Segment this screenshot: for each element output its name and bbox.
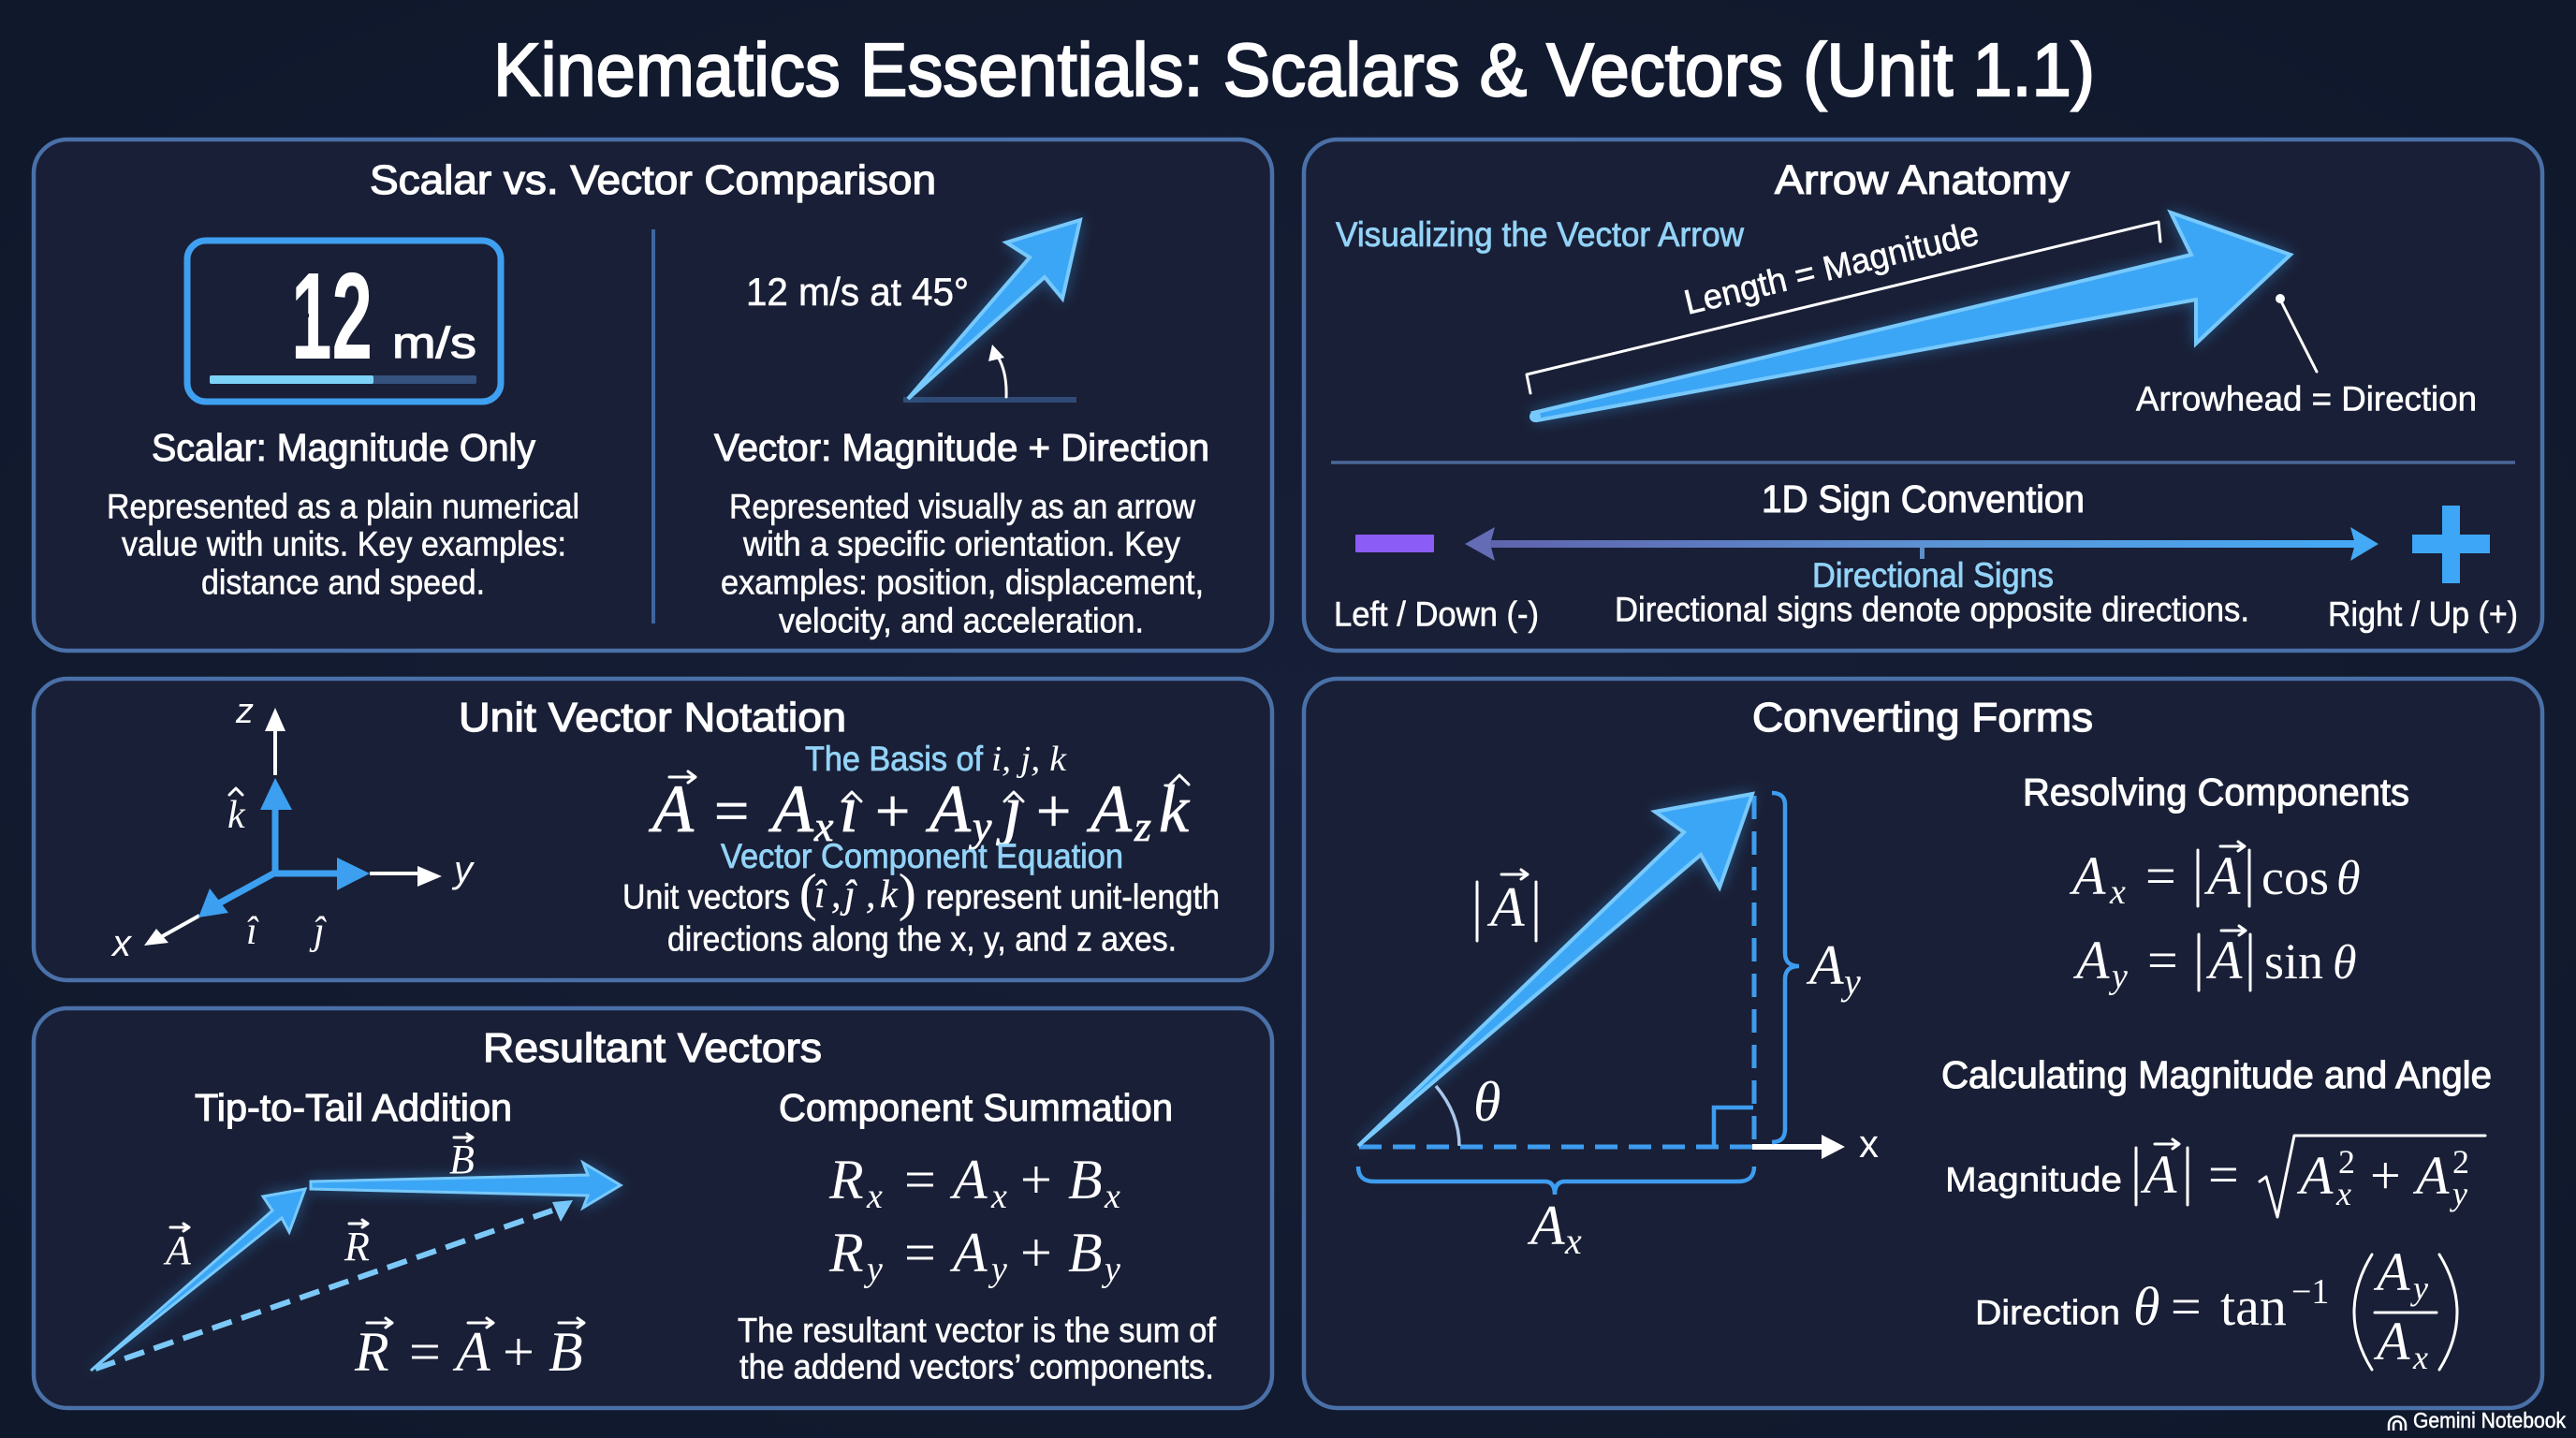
text block: scalar description: Represented as a plain numerical bbox=[107, 487, 579, 526]
equation: magnitude: 2 bbox=[2452, 1143, 2469, 1181]
equation: component sums: y bbox=[1101, 1250, 1120, 1289]
text block: scalar description: distance and speed. bbox=[201, 564, 485, 601]
equations: component formulas: = bbox=[2145, 845, 2176, 906]
text block: unit vector description: î bbox=[814, 873, 827, 917]
equation: component sums: = bbox=[904, 1222, 936, 1284]
text block: resultant description: the addend vectors’ components. bbox=[739, 1348, 1214, 1386]
subheading: visualizing the vector arrow: Visualizing the Vector Arrow bbox=[1336, 215, 1744, 254]
text block: vector description: Represented visually as an arrow bbox=[729, 487, 1195, 526]
subheading: component summation: Component Summation bbox=[779, 1086, 1173, 1129]
equation: unit vector decomposition: y bbox=[969, 802, 992, 850]
equation: unit vector decomposition: x bbox=[813, 802, 834, 850]
diagram: 3D axes with unit vectors: k bbox=[227, 794, 246, 837]
equation: direction angle: A bbox=[2373, 1311, 2410, 1372]
subheading: basis: The Basis of bbox=[805, 740, 984, 778]
equation: direction angle: −1 bbox=[2291, 1272, 2329, 1312]
equations: component formulas: = bbox=[2147, 930, 2178, 990]
panel: scalar vs vector comparison bbox=[34, 139, 1272, 651]
diagram: tip-to-tail vector addition bbox=[91, 1134, 621, 1371]
heading: unit vector notation: Unit Vector Notation bbox=[459, 695, 846, 741]
equation: unit vector decomposition: = bbox=[714, 777, 749, 845]
equations: component formulas: A bbox=[2205, 930, 2243, 990]
text block: unit vector description: Unit vectors bbox=[622, 878, 790, 916]
equation: unit vector decomposition: ı bbox=[840, 771, 858, 846]
panel: unit vector notation bbox=[34, 679, 1272, 980]
equation: R = A + B: = bbox=[409, 1321, 441, 1383]
equation: component sums: + bbox=[1020, 1149, 1052, 1211]
text block: unit vector description: k bbox=[880, 873, 899, 917]
equations: component formulas: θ bbox=[2336, 852, 2361, 905]
heading: resultant vectors: Resultant Vectors bbox=[483, 1025, 822, 1071]
equations: component formulas: cos bbox=[2261, 849, 2329, 905]
equations: component formulas: A bbox=[2069, 845, 2106, 906]
equation: unit vector decomposition: + bbox=[1036, 777, 1071, 845]
title: Kinematics Essentials: Scalars & Vectors (Unit 1.1) bbox=[493, 28, 2095, 111]
diagram: 3D axes with unit vectors: ĵ bbox=[309, 910, 327, 953]
text block: resultant description bbox=[738, 1311, 1217, 1386]
text block: scalar description: Scalar: Magnitude Only bbox=[152, 426, 535, 469]
icon: scalar digital readout: m/s bbox=[392, 318, 476, 367]
diagram: 3D axes with unit vectors: î bbox=[246, 910, 259, 953]
panel: resultant vectors bbox=[34, 1008, 1272, 1408]
equation: direction angle: y bbox=[2410, 1269, 2428, 1307]
diagram: right triangle components: A bbox=[1486, 876, 1525, 938]
text block: unit vector description: represent unit-length bbox=[926, 878, 1220, 916]
equation: R = A + B: R bbox=[354, 1321, 389, 1383]
equation: direction angle: x bbox=[2412, 1339, 2428, 1376]
text block: unit vector description: ) bbox=[899, 864, 916, 922]
equation: component sums: A bbox=[949, 1149, 988, 1211]
equation: component sums: x bbox=[866, 1177, 883, 1216]
equation: R = A + B bbox=[354, 1318, 584, 1383]
caption: directional signs: Directional signs denote opposite directions. bbox=[1615, 590, 2249, 629]
equation: unit vector decomposition: A bbox=[1087, 771, 1133, 846]
equation: direction angle bbox=[1975, 1241, 2457, 1376]
diagram: anatomy arrow with labels bbox=[1527, 213, 2477, 422]
diagram: anatomy arrow with labels: Arrowhead = Direction bbox=[2136, 380, 2477, 418]
icon: plus sign bbox=[2412, 506, 2490, 583]
equation: unit vector decomposition: ȷ bbox=[996, 771, 1022, 846]
diagram: right triangle components bbox=[1358, 793, 1879, 1262]
equation: R = A + B: + bbox=[503, 1321, 534, 1383]
equation: unit vector decomposition: k bbox=[1159, 771, 1191, 846]
icon: vector arrow at 45 degrees: 12 m/s at 45° bbox=[746, 270, 969, 314]
label: left down: Left / Down (-) bbox=[1334, 595, 1539, 633]
subheading: basis: i, j, k bbox=[991, 740, 1067, 779]
text block: unit vector description bbox=[622, 864, 1220, 959]
diagram: 3D axes with unit vectors: z bbox=[235, 692, 254, 731]
text block: unit vector description: , bbox=[831, 873, 841, 917]
equation: magnitude: + bbox=[2370, 1145, 2401, 1206]
diagram: tip-to-tail vector addition: B bbox=[449, 1137, 475, 1182]
equations: component formulas: x bbox=[2109, 873, 2126, 912]
text block: unit vector description: directions along the x, y, and z axes. bbox=[667, 919, 1177, 959]
equation: component sums: R bbox=[828, 1149, 864, 1211]
equations: component formulas: A bbox=[2203, 845, 2241, 906]
watermark: Gemini Notebook: Gemini Notebook bbox=[2413, 1408, 2566, 1432]
equation: component sums bbox=[828, 1149, 1120, 1289]
text block: unit vector description: ( bbox=[799, 864, 817, 922]
equation: direction angle: A bbox=[2373, 1241, 2410, 1302]
equation: component sums: x bbox=[1104, 1177, 1120, 1216]
equation: component sums: B bbox=[1068, 1149, 1103, 1211]
equation: component sums: + bbox=[1020, 1222, 1052, 1284]
heading: converting forms: Converting Forms bbox=[1752, 695, 2093, 741]
equations: component formulas: y bbox=[2108, 957, 2128, 996]
diagram: 3D axes with unit vectors bbox=[110, 692, 476, 964]
subheading: component equation: Vector Component Equation bbox=[721, 837, 1123, 875]
equation: component sums: y bbox=[988, 1250, 1007, 1289]
equation: unit vector decomposition bbox=[649, 771, 1191, 850]
diagram: right triangle components: x bbox=[1859, 1122, 1879, 1166]
equation: magnitude: A bbox=[2412, 1145, 2450, 1206]
caption: directional signs: Directional Signs bbox=[1812, 556, 2054, 594]
equations: component formulas: sin bbox=[2264, 933, 2323, 990]
text block: scalar description: value with units. Key examples: bbox=[122, 524, 566, 564]
text block: vector description bbox=[714, 426, 1209, 640]
equation: component sums: A bbox=[949, 1222, 988, 1284]
icon: scalar digital readout: 12 bbox=[291, 247, 373, 385]
equation: direction angle: = bbox=[2171, 1276, 2202, 1337]
equation: unit vector decomposition: A bbox=[768, 771, 814, 846]
panel: converting forms bbox=[1304, 679, 2542, 1408]
diagram: right triangle components: A bbox=[1527, 1195, 1565, 1256]
equation: unit vector decomposition: A bbox=[926, 771, 972, 846]
equation: R = A + B: A bbox=[452, 1321, 490, 1383]
caption: directional signs bbox=[1615, 556, 2249, 629]
label: right up: Right / Up (+) bbox=[2328, 595, 2518, 633]
heading: 1D sign convention: 1D Sign Convention bbox=[1762, 477, 2085, 521]
equation: magnitude: A bbox=[2296, 1145, 2334, 1206]
diagram: right triangle components: θ bbox=[1473, 1071, 1500, 1133]
equation: magnitude: = bbox=[2208, 1144, 2239, 1205]
text block: vector description: Vector: Magnitude + Direction bbox=[714, 426, 1209, 469]
diagram: 3D axes with unit vectors: x bbox=[110, 923, 133, 964]
diagram: right triangle components: x bbox=[1564, 1220, 1582, 1262]
equation: magnitude: 2 bbox=[2338, 1143, 2355, 1181]
heading: scalar vs vector: Scalar vs. Vector Comparison bbox=[370, 157, 936, 203]
subheading: resolving components: Resolving Components bbox=[2023, 770, 2409, 814]
equation: component sums: B bbox=[1068, 1222, 1103, 1284]
subheading: calculating magnitude and angle: Calculating Magnitude and Angle bbox=[1941, 1053, 2492, 1096]
subheading: tip to tail: Tip-to-Tail Addition bbox=[195, 1086, 512, 1129]
equation: component sums: = bbox=[904, 1149, 936, 1211]
equation: unit vector decomposition: A bbox=[649, 771, 695, 846]
equation: magnitude: A bbox=[2140, 1144, 2177, 1205]
diagram: 3D axes with unit vectors: y bbox=[451, 849, 476, 890]
icon: scalar digital readout bbox=[187, 241, 501, 402]
equation: direction angle: tan bbox=[2220, 1276, 2287, 1337]
diagram: tip-to-tail vector addition: A bbox=[163, 1227, 192, 1273]
equation: component sums: R bbox=[828, 1222, 864, 1284]
icon: vector arrow at 45 degrees bbox=[746, 220, 1080, 400]
diagram: right triangle components: y bbox=[1840, 961, 1861, 1003]
text block: unit vector description: ĵ bbox=[840, 873, 857, 917]
equations: component formulas: A bbox=[2072, 930, 2110, 990]
text block: resultant description: The resultant vector is the sum of bbox=[738, 1311, 1217, 1350]
text block: scalar description bbox=[107, 426, 579, 601]
text block: vector description: with a specific orientation. Key bbox=[742, 524, 1180, 564]
equation: magnitude: Magnitude bbox=[1945, 1161, 2122, 1198]
equations: component formulas: θ bbox=[2333, 936, 2357, 990]
equation: unit vector decomposition: + bbox=[875, 777, 910, 845]
equation: magnitude bbox=[1945, 1136, 2485, 1217]
icon: minus sign bbox=[1355, 535, 1434, 552]
equation: component sums: y bbox=[863, 1250, 883, 1289]
equation: unit vector decomposition: z bbox=[1134, 802, 1151, 850]
double-headed direction arrow bbox=[1465, 527, 2378, 561]
diagram: tip-to-tail vector addition: R bbox=[344, 1224, 370, 1269]
text block: vector description: examples: position, displacement, bbox=[721, 564, 1204, 601]
diagram: anatomy arrow with labels: Length = Magnitude bbox=[1680, 213, 1983, 322]
diagram: right triangle components: A bbox=[1806, 934, 1844, 996]
equation: magnitude: y bbox=[2450, 1175, 2467, 1212]
equation: R = A + B: B bbox=[549, 1321, 583, 1383]
text block: vector description: velocity, and acceleration. bbox=[779, 601, 1144, 640]
equation: component sums: x bbox=[990, 1177, 1007, 1216]
equations: component formulas bbox=[2069, 842, 2361, 996]
equation: direction angle: θ bbox=[2133, 1276, 2160, 1337]
equation: direction angle: Direction bbox=[1975, 1294, 2120, 1331]
panel: arrow anatomy bbox=[1304, 139, 2542, 651]
text block: unit vector description: , bbox=[866, 873, 876, 917]
equation: magnitude: x bbox=[2335, 1175, 2351, 1212]
heading: arrow anatomy: Arrow Anatomy bbox=[1775, 157, 2070, 203]
